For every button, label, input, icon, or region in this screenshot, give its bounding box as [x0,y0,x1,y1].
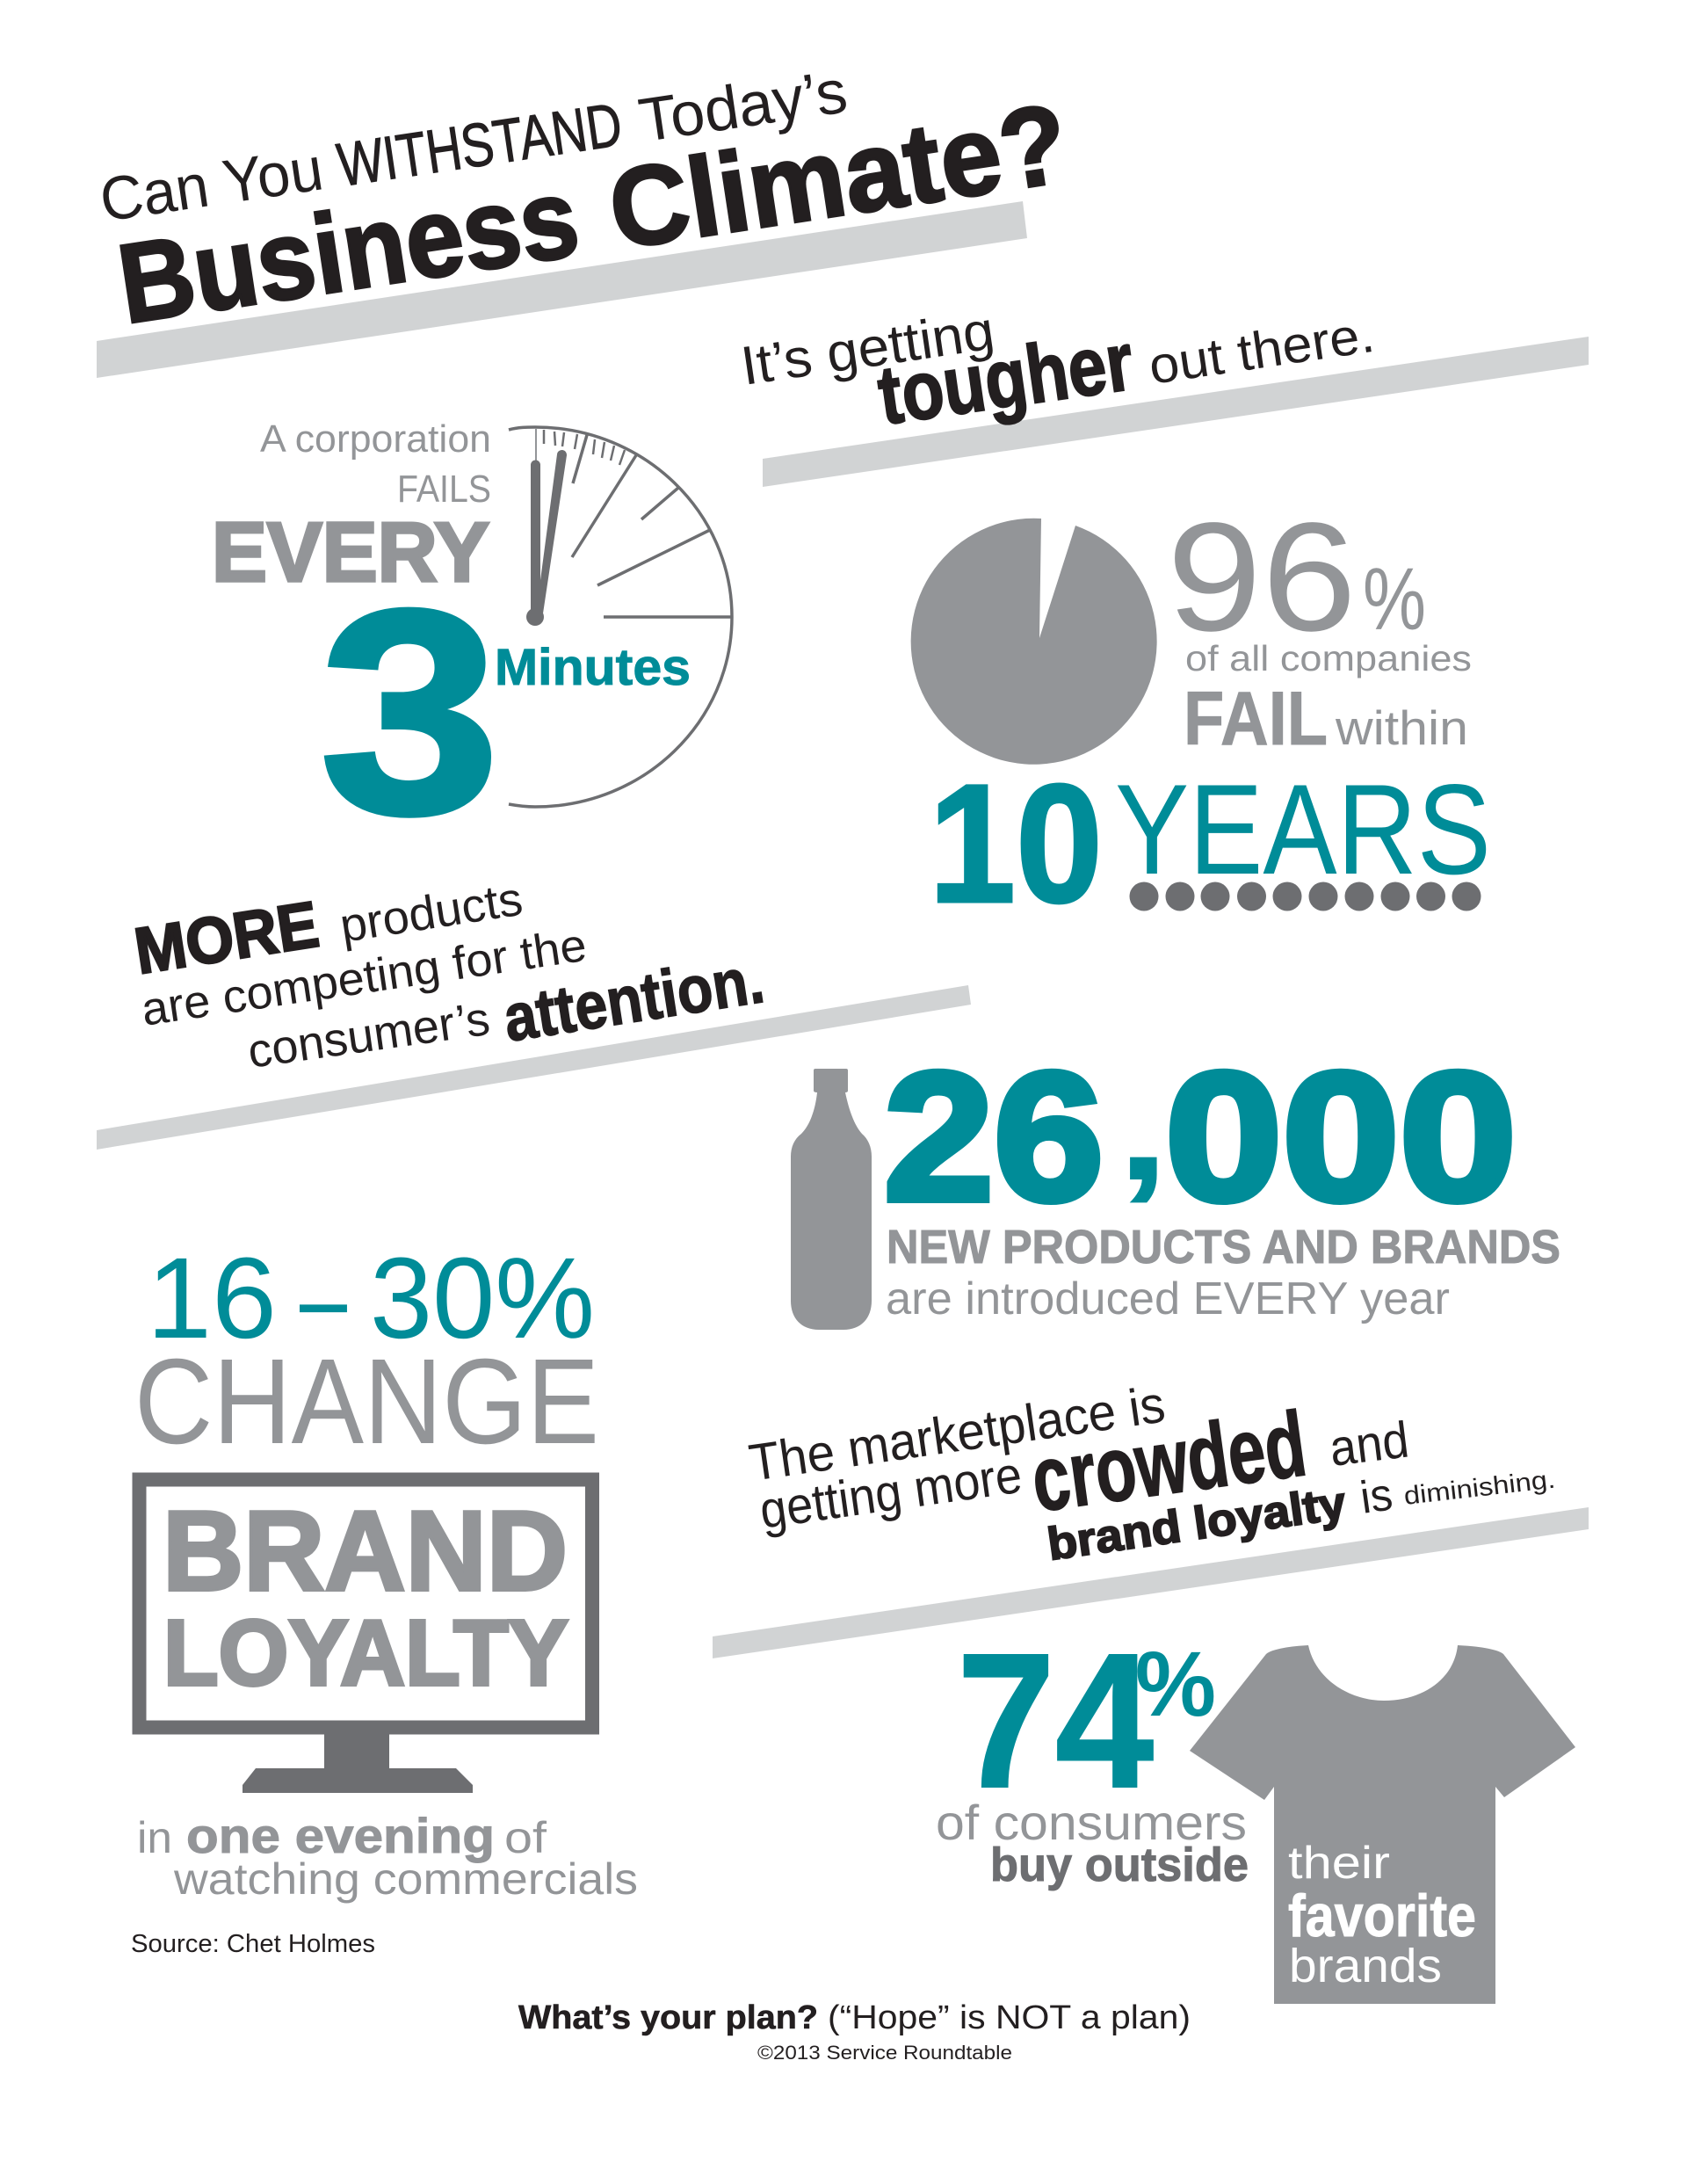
stat: 26,000: 26 [884,1035,1104,1239]
attention band [97,985,971,1150]
section heading: tougher [737,301,1589,487]
stat: percent sign: % [1363,550,1426,649]
stat: 26,000: 000 [1165,1035,1517,1239]
shirt text: brands: brands [1289,1940,1442,1992]
heading text: diminishing: diminishing. [1402,1466,1557,1511]
stat: 16-30 percent: 16 [147,1233,277,1362]
heading text: getting more: getting more [757,1446,1025,1540]
monitor text: loyalty: LOYALTY [163,1601,568,1705]
title line: can you withstand today's: Today’s [634,56,851,155]
title line: business climate: Business [111,155,586,348]
text: within: within [1335,700,1468,755]
stat: years: YEARS [1115,758,1491,901]
title band [97,201,1027,378]
heading text: out there: out there. [1145,305,1378,395]
section heading: more products [97,856,971,1150]
heading text: more products: MORE [130,888,323,988]
stat: 16-30 percent [147,1233,595,1362]
text: minutes: Minutes [495,639,691,696]
panel: corporation fails every 3 minutes [212,417,732,874]
title line: can you withstand today's: Can You [96,134,327,235]
stat: 26,000: , [1117,1045,1169,1212]
stat: 74: 74 [957,1614,1154,1828]
footer remark: (“Hope” is NOT a plan) [828,1999,1191,2036]
heading text: the marketplace is: The marketplace is [745,1375,1169,1492]
stat: percent sign: % [1135,1633,1216,1736]
panel: 26,000 new products [791,1035,1560,1330]
text: every: EVERY [212,505,489,599]
copyright: ©2013 Service Roundtable [757,2042,1012,2064]
tougher band [763,337,1589,487]
heading text: crowded: crowded [1025,1392,1312,1532]
panel: 96 percent fail within 10 years [911,491,1491,938]
shirt text: their: their [1288,1838,1390,1889]
heading text: and: and [1327,1411,1412,1477]
caption line 2: watching commercials: watching commercials [173,1854,638,1904]
caption line 1: in one evening of: in [137,1813,172,1862]
heading text: more products: products [337,873,526,953]
panel: 74 percent buy outside favorite brands [936,1614,1575,2004]
text: a corporation: A corporation [260,417,491,461]
big number 3: 3 [320,549,500,874]
heading text: tougher: tougher [872,315,1139,442]
text: new products and brands: NEW PRODUCTS AND BRANDS [887,1221,1560,1273]
heading text: are competing for the: are competing for the [138,919,590,1036]
stat: 16-30 percent: – [300,1233,347,1362]
icon: stopwatch dial [509,427,732,807]
stat: 16-30 percent: 30% [370,1233,595,1362]
text: change: CHANGE [134,1334,599,1469]
text: introduced every year: are introduced EVERY year [886,1273,1450,1324]
text: fails: FAILS [397,468,491,511]
text: of consumers: of consumers [936,1795,1247,1850]
title [96,56,1075,378]
stat: 96: 96 [1167,491,1357,664]
caption line 1: in one evening of: one evening [186,1808,495,1863]
stat: 26,000 [884,1035,1517,1239]
icon: ten dots [1130,882,1481,911]
text: fail: FAIL [1184,677,1328,761]
crowded band [713,1507,1589,1658]
title line: business climate: Climate? [601,80,1075,273]
title line: can you withstand today's [96,56,851,235]
panel: brand loyalty change [131,1233,638,1958]
icon: bottle [791,1069,872,1330]
heading text: more products [130,856,526,988]
heading text: consumer's: consumer’s [244,992,493,1078]
icon: t-shirt [1190,1645,1575,2004]
title line: business climate [111,80,1075,348]
pie chart: 96 percent [911,519,1157,765]
heading text: brand loyalty: brand loyalty [1045,1477,1349,1571]
shirt text: favorite: favorite [1288,1883,1476,1949]
icon: monitor [139,1480,592,1793]
footer [518,1999,1191,2064]
text: buy outside: buy outside [990,1839,1249,1891]
heading text: it's getting: It’s getting [737,301,998,397]
footer question: What’s your plan? [518,1999,818,2036]
heading text: attention: attention. [499,942,769,1056]
stat: 10: 10 [929,749,1103,938]
caption line 1: in one evening of: of [504,1813,547,1862]
title line: can you withstand today's: WITHSTAND [333,90,626,200]
section heading: crowded marketplace [713,1375,1589,1658]
heading text: is: is [1358,1469,1395,1524]
monitor text: brand: BRAND [163,1488,568,1614]
source: Source: Chet Holmes [131,1930,375,1958]
text: of all companies: of all companies [1185,638,1472,678]
